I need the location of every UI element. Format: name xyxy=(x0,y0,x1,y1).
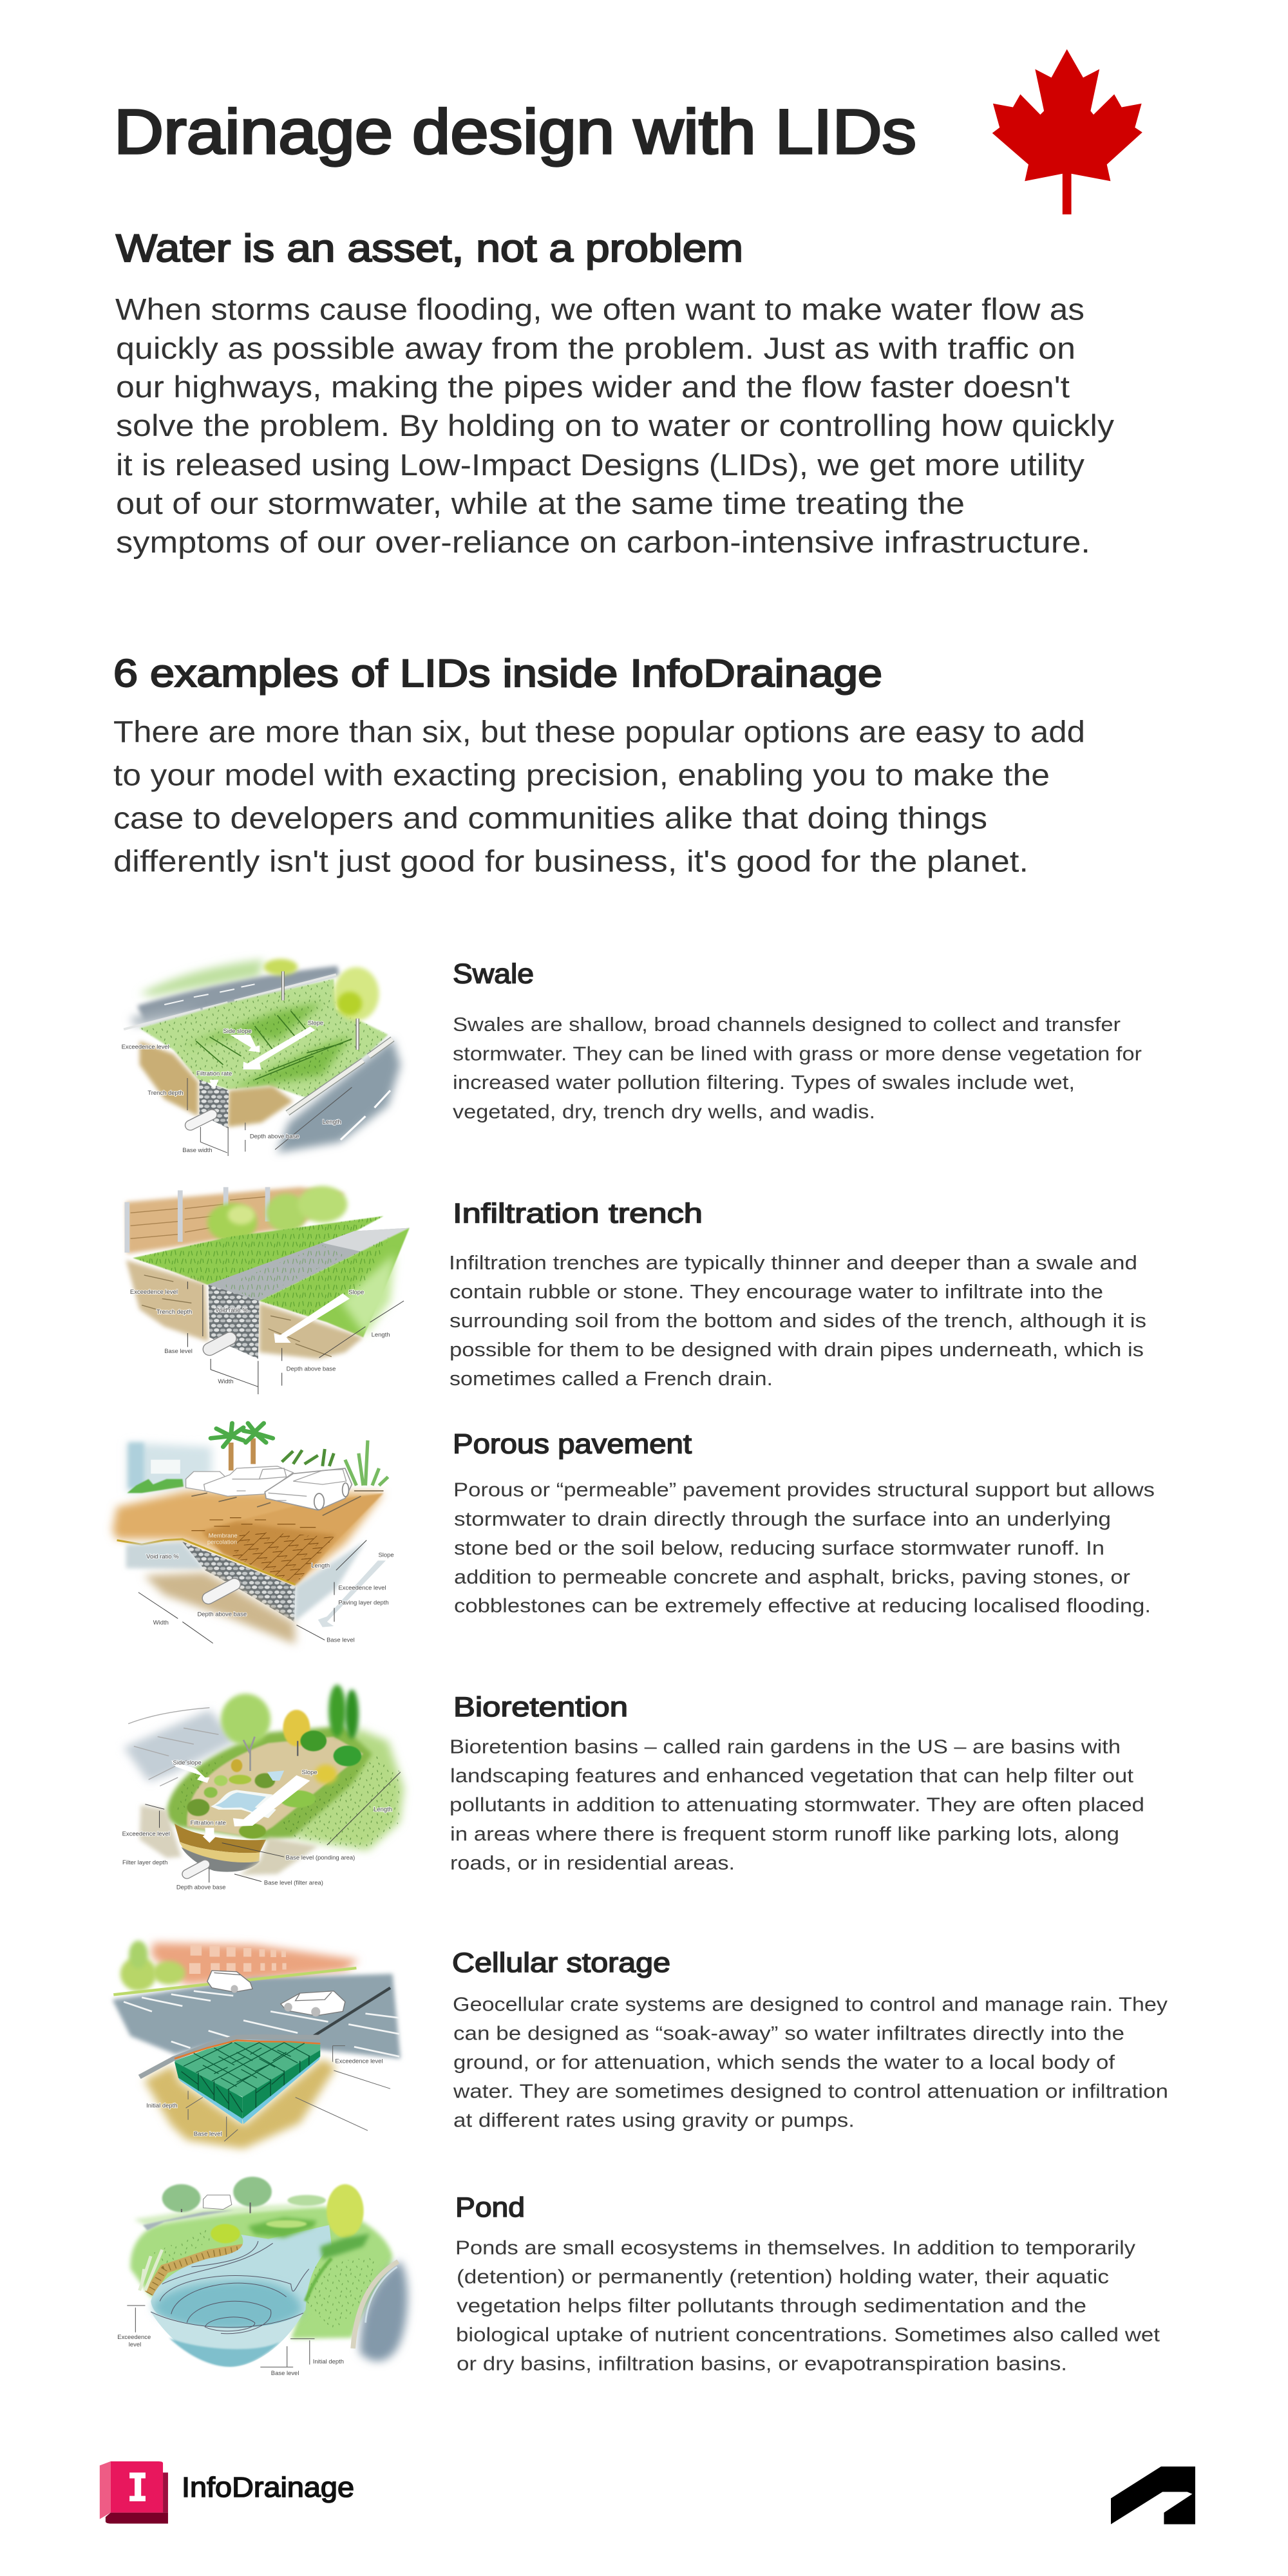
panel: porous pavement text: stone bed or the soil below, reducing surface stormwater runoff. In xyxy=(454,1537,1104,1559)
panel: porous pavement illustration: Length xyxy=(311,1562,330,1569)
panel: swale illustration: Trench depth xyxy=(147,1090,184,1096)
text block: introduction xyxy=(115,292,1115,559)
panel: porous pavement text: Porous or “permeable” pavement provides structural support but allows xyxy=(453,1479,1155,1501)
text block: introduction: quickly as possible away from the problem. Just as with traffic on xyxy=(116,331,1075,365)
panel: pond illustration: Base level xyxy=(271,2370,299,2376)
panel: swale illustration: Side slope xyxy=(223,1028,252,1034)
panel: cellular storage text xyxy=(452,1947,1168,2132)
panel: swale text xyxy=(453,959,1142,1122)
panel: swale illustration: Slope xyxy=(308,1020,323,1027)
panel: bioretention illustration: Base level (filter area) xyxy=(264,1880,323,1886)
panel: infiltration trench illustration: Slope xyxy=(348,1289,364,1295)
panel: bioretention illustration: Side slope xyxy=(173,1759,202,1766)
panel: pond illustration: level xyxy=(129,2342,141,2348)
panel: pond text: vegetation helps filter pollutants through sedimentation and the xyxy=(457,2294,1086,2317)
panel: porous pavement illustration xyxy=(113,1423,394,1644)
panel: infiltration trench text: Infiltration trenches are typically thinner and deeper than a swale and xyxy=(449,1251,1137,1274)
panel: swale illustration: Length xyxy=(323,1119,341,1125)
panel: bioretention illustration: Depth above base xyxy=(176,1884,226,1890)
panel: infiltration trench text: surrounding soil from the bottom and sides of the trench, although it is xyxy=(450,1309,1146,1332)
panel: bioretention text: roads, or in residential areas. xyxy=(450,1852,735,1874)
text block: examples introduction xyxy=(113,715,1085,878)
panel: cellular storage text: water. They are sometimes designed to control attenuation or infiltration xyxy=(453,2080,1168,2103)
panel: pond text: (detention) or permanently (retention) holding water, their aquatic xyxy=(457,2266,1109,2287)
icon: InfoDrainage logo xyxy=(100,2461,168,2524)
panel: cellular storage illustration: Exceedence level xyxy=(335,2058,383,2064)
panel: pond text: Pond xyxy=(455,2192,525,2223)
panel: swale illustration: Base width xyxy=(182,1147,213,1153)
panel: bioretention text: landscaping features and enhanced vegetation that can help filter out xyxy=(450,1765,1133,1787)
panel: cellular storage text: Geocellular crate systems are designed to control and manage rain. They xyxy=(453,1993,1168,2016)
panel: swale text: stormwater. They can be lined with grass or more dense vegetation for xyxy=(453,1042,1142,1065)
panel: bioretention illustration: Slope xyxy=(302,1769,317,1776)
panel: pond text: or dry basins, infiltration basins, or evapotranspiration basins. xyxy=(457,2352,1067,2374)
panel: bioretention illustration xyxy=(122,1685,404,1890)
heading: water is an asset: Water is an asset, not a problem xyxy=(116,227,743,270)
panel: infiltration trench illustration: Trench depth xyxy=(156,1309,192,1315)
panel: swale illustration: Depth above base xyxy=(250,1133,299,1139)
panel: porous pavement text: stormwater to drain directly through the surface into an underlying xyxy=(454,1508,1111,1530)
panel: cellular storage illustration xyxy=(113,1940,401,2149)
panel: swale illustration: Filtration rate xyxy=(196,1070,232,1077)
text block: examples introduction: to your model with exacting precision, enabling you to make the xyxy=(113,757,1050,791)
panel: porous pavement text: cobblestones can be extremely effective at reducing localised flooding. xyxy=(454,1594,1151,1616)
panel: infiltration trench illustration: Void ratio % xyxy=(215,1307,248,1313)
panel: infiltration trench illustration: Exceedence level xyxy=(130,1289,178,1295)
text block: introduction: our highways, making the pipes wider and the flow faster doesn't xyxy=(116,370,1070,404)
panel: bioretention text: pollutants in addition to attenuating stormwater. They are often placed xyxy=(450,1794,1144,1816)
panel: cellular storage illustration: Initial depth xyxy=(146,2103,178,2108)
text block: examples introduction: case to developers and communities alike that doing things xyxy=(113,801,987,835)
logo wordmark: InfoDrainage: InfoDrainage xyxy=(182,2472,354,2503)
panel: pond text: Ponds are small ecosystems in themselves. In addition to temporarily xyxy=(455,2236,1136,2259)
panel: porous pavement text: Porous pavement xyxy=(453,1429,692,1460)
panel: cellular storage illustration: Base level xyxy=(194,2131,222,2137)
text block: examples introduction: There are more than six, but these popular options are easy to add xyxy=(113,715,1085,749)
text block: examples introduction: differently isn't just good for business, it's good for the planet. xyxy=(113,844,1028,878)
panel: porous pavement illustration: Slope xyxy=(378,1552,394,1558)
panel: porous pavement illustration: Paving layer depth xyxy=(338,1600,389,1606)
panel: bioretention text: Bioretention basins – called rain gardens in the US – are basins with xyxy=(450,1735,1121,1757)
panel: bioretention illustration: Filter layer depth xyxy=(122,1859,167,1866)
text block: introduction: out of our stormwater, while at the same time treating the xyxy=(116,486,965,520)
text block: introduction: symptoms of our over-reliance on carbon-intensive infrastructure. xyxy=(116,525,1090,559)
panel: infiltration trench text: possible for them to be designed with drain pipes underneath, which is xyxy=(450,1338,1144,1361)
panel: cellular storage text: ground, or for attenuation, which sends the water to a local body of xyxy=(453,2051,1115,2074)
panel: infiltration trench text: Infiltration trench xyxy=(453,1198,703,1229)
panel: porous pavement text xyxy=(453,1429,1155,1616)
panel: swale text: increased water pollution filtering. Types of swales include wet, xyxy=(453,1071,1075,1094)
panel: infiltration trench illustration: Base level xyxy=(164,1348,193,1354)
panel: swale text: Swale xyxy=(453,959,534,990)
text block: introduction: solve the problem. By holding on to water or controlling how quickly xyxy=(116,408,1115,442)
panel: porous pavement illustration: Width xyxy=(153,1620,169,1626)
panel: infiltration trench illustration xyxy=(126,1186,410,1394)
panel: swale illustration xyxy=(122,959,401,1156)
panel: porous pavement illustration: Membrane xyxy=(209,1533,238,1539)
panel: porous pavement illustration: Exceedence level xyxy=(338,1585,386,1591)
panel: bioretention illustration: Exceedence level xyxy=(122,1831,170,1837)
icon: Autodesk logo xyxy=(1111,2467,1195,2524)
title: Drainage design with LIDs xyxy=(114,97,916,167)
icon: red maple leaf xyxy=(992,49,1142,214)
text block: introduction: When storms cause flooding, we often want to make water flow as xyxy=(115,292,1084,326)
panel: swale text: vegetated, dry, trench dry wells, and wadis. xyxy=(453,1100,875,1122)
panel: infiltration trench text: sometimes called a French drain. xyxy=(450,1367,773,1390)
panel: bioretention illustration: Base level (ponding area) xyxy=(286,1855,355,1861)
panel: porous pavement illustration: Depth above base xyxy=(197,1611,247,1617)
panel: swale text: Swales are shallow, broad channels designed to collect and transfer xyxy=(453,1013,1121,1036)
panel: porous pavement illustration: Base level xyxy=(327,1637,355,1643)
panel: cellular storage text: Cellular storage xyxy=(452,1947,670,1978)
panel: cellular storage text: can be designed as “soak-away” so water infiltrates directly into the xyxy=(453,2022,1124,2045)
panel: bioretention text xyxy=(450,1692,1144,1874)
panel: porous pavement illustration: Void ratio % xyxy=(146,1553,179,1560)
panel: pond illustration: Initial depth xyxy=(313,2358,344,2365)
panel: bioretention illustration: Length xyxy=(374,1806,392,1813)
panel: cellular storage text: at different rates using gravity or pumps. xyxy=(453,2109,855,2132)
panel: infiltration trench illustration: Length xyxy=(372,1332,390,1338)
panel: bioretention illustration: Filtration rate xyxy=(191,1820,226,1826)
panel: bioretention text: in areas where there is frequent storm runoff like parking lots, along xyxy=(450,1823,1119,1845)
panel: pond illustration: Exceedence xyxy=(117,2334,151,2340)
heading: 6 examples: 6 examples of LIDs inside InfoDrainage xyxy=(113,652,882,695)
panel: infiltration trench illustration: Width xyxy=(218,1378,234,1385)
panel: pond text: biological uptake of nutrient concentrations. Sometimes also called wet xyxy=(456,2323,1160,2345)
text block: introduction: it is released using Low-Impact Designs (LIDs), we get more utility xyxy=(116,448,1085,482)
panel: bioretention text: Bioretention xyxy=(453,1692,628,1723)
panel: swale illustration: Exceedence level xyxy=(122,1044,169,1050)
panel: pond illustration xyxy=(117,2177,408,2376)
panel: pond text xyxy=(455,2192,1160,2374)
panel: porous pavement illustration: percolation xyxy=(207,1539,237,1546)
panel: infiltration trench illustration: Depth above base xyxy=(287,1366,336,1372)
panel: infiltration trench text: contain rubble or stone. They encourage water to infiltrate into the xyxy=(450,1280,1103,1303)
panel: infiltration trench text xyxy=(449,1198,1146,1390)
panel: porous pavement text: addition to permeable concrete and asphalt, bricks, paving stones, or xyxy=(454,1566,1130,1588)
